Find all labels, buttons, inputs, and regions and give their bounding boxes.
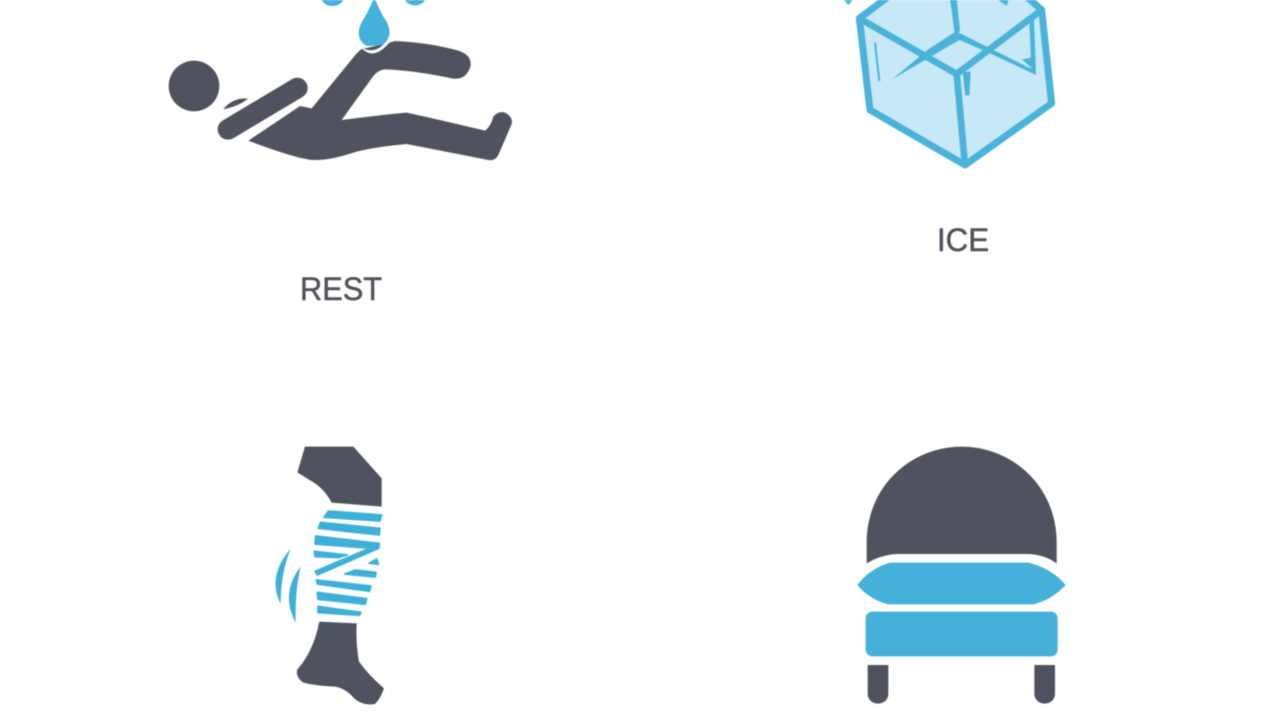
- cube faces: [859, 0, 1052, 165]
- dome: [867, 447, 1057, 563]
- person arm: [228, 88, 297, 129]
- outer swelling mark: [276, 549, 291, 604]
- dark sliver under drop: [363, 44, 384, 50]
- bandage stripes: [314, 511, 382, 615]
- icon: leg elevated on pillow stool: [857, 447, 1066, 704]
- icon: bandaged leg: [276, 447, 384, 704]
- cube outline: [859, 0, 1052, 165]
- person body and legs: [248, 41, 512, 160]
- seat cushion: [866, 612, 1058, 656]
- inner swelling mark: [289, 567, 301, 623]
- icon: person resting with water drops: [169, 0, 512, 160]
- lower leg and foot: [297, 622, 384, 704]
- person head: [169, 61, 219, 111]
- cube front top edges: [859, 10, 1042, 165]
- pillow: [857, 563, 1066, 604]
- center water drop: [359, 0, 390, 46]
- small motion mark: [223, 99, 248, 109]
- right stool leg: [1034, 665, 1055, 704]
- melting drop marks: [844, 0, 1008, 6]
- cube inner back edges: [874, 0, 1036, 95]
- left stool leg: [868, 665, 888, 704]
- left water drop: [322, 0, 343, 6]
- label: rest: REST: [300, 271, 382, 307]
- right water drop: [405, 0, 425, 5]
- label: ice: ICE: [937, 222, 989, 258]
- icon: ice cube: [844, 0, 1052, 165]
- thigh: [297, 447, 382, 507]
